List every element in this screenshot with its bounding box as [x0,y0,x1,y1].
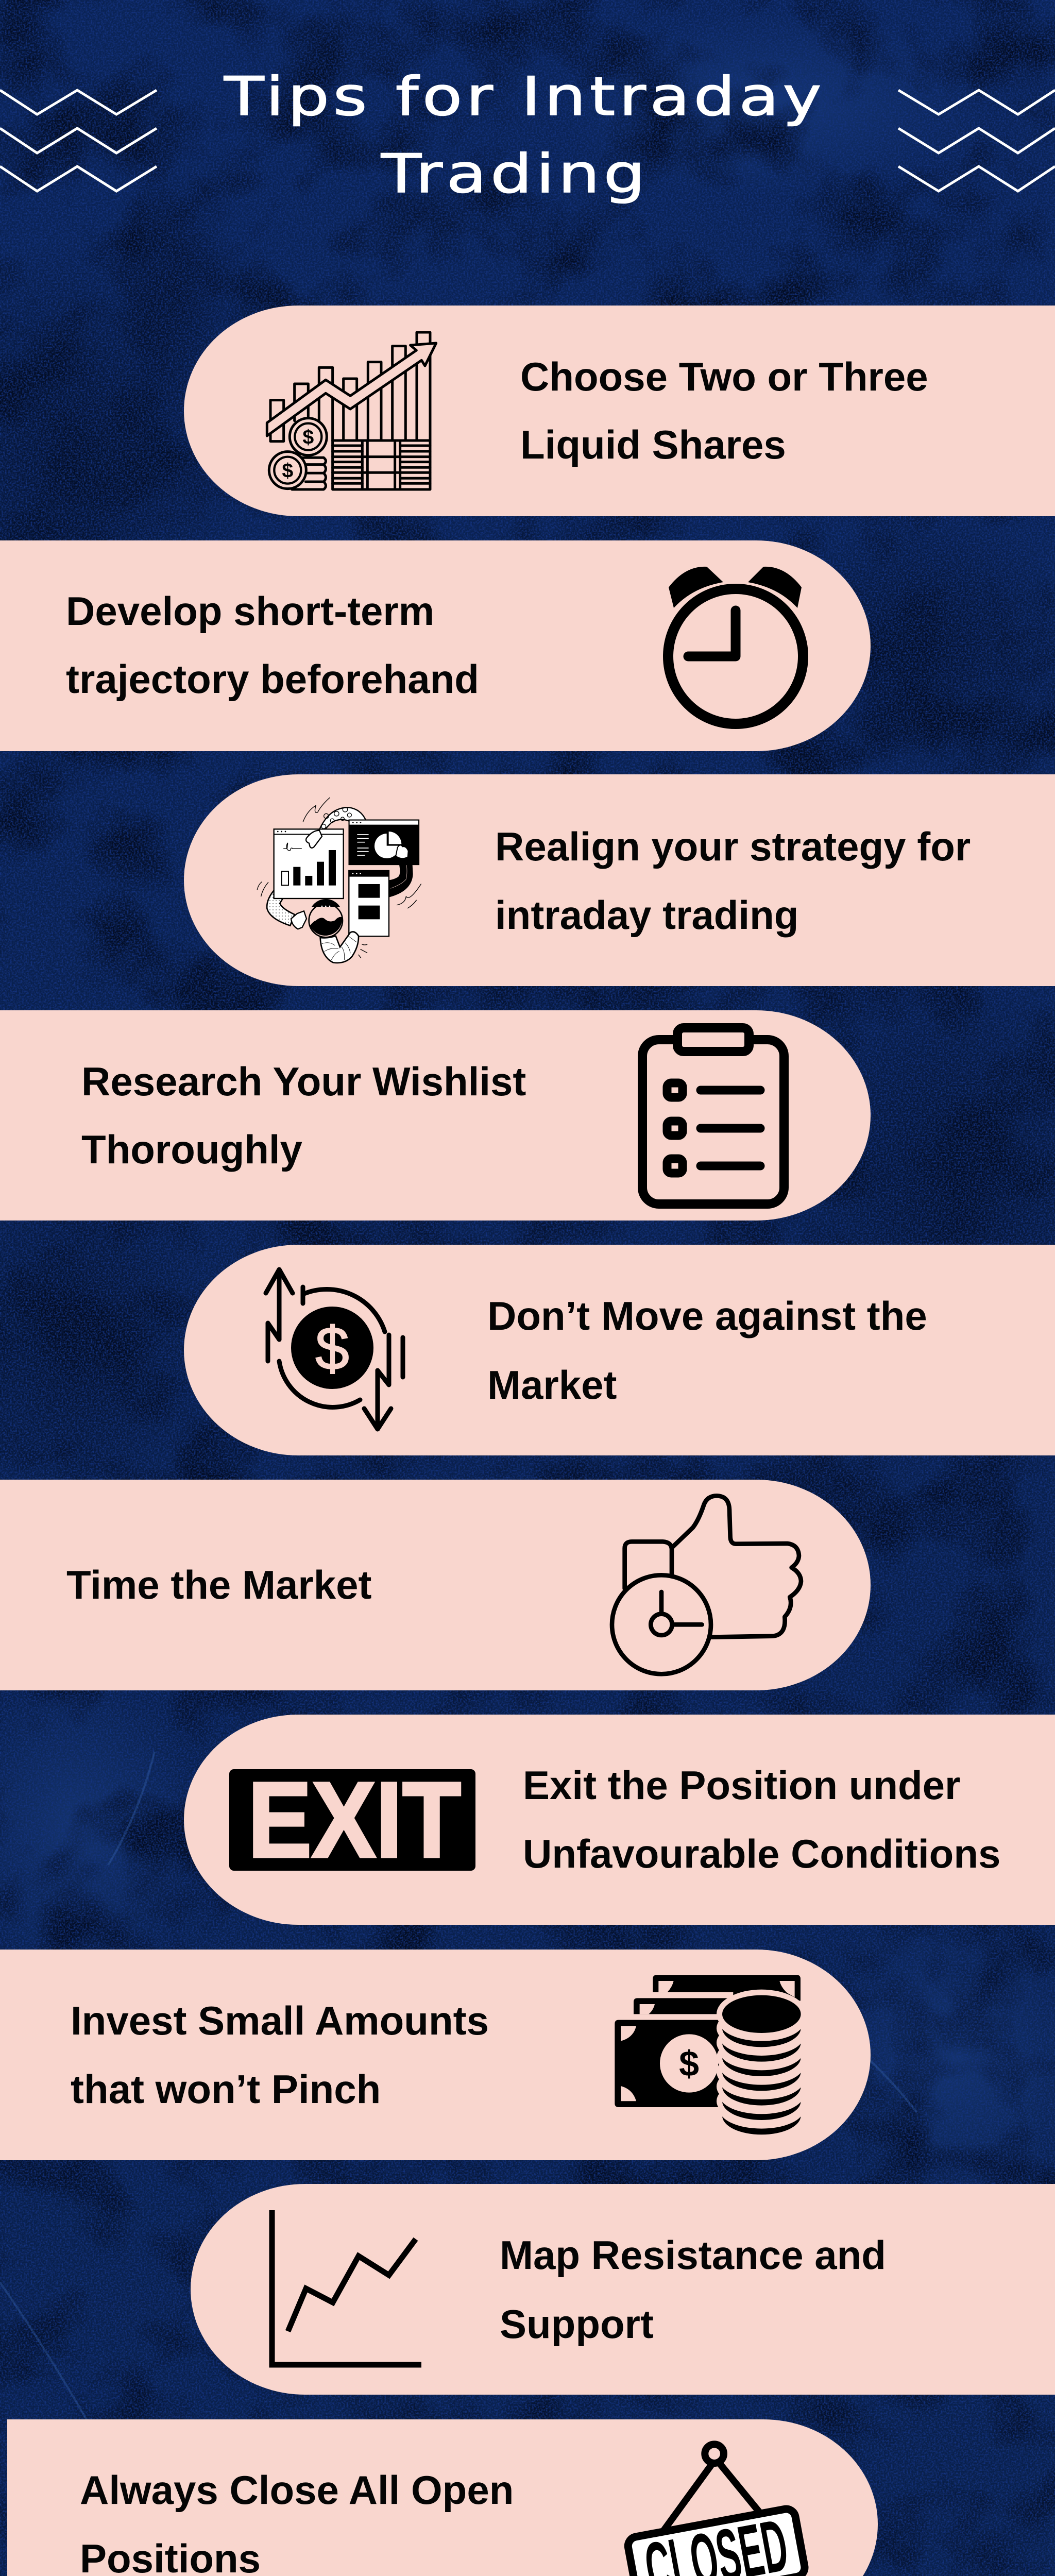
text: research your wishlist thoroughly: Thoroughly [81,1127,302,1172]
text: invest small amounts that won't pinch: that won’t Pinch [71,2066,381,2112]
icon: rising bar chart with coins: $ [282,460,293,482]
text: don't move against the market [487,1293,927,1408]
text: time the market: Time the Market [66,1562,371,1607]
text: don't move against the market: Don’t Move against the [487,1293,927,1338]
icon: thumbs up with clock [612,1496,801,1674]
title: Trading [381,143,649,205]
text: research your wishlist thoroughly [81,1059,526,1172]
text: realign your strategy for intraday trading: intraday trading [495,892,798,938]
panel: choose two or three liquid shares [184,306,1055,516]
icon: clipboard checklist [642,1028,784,1204]
icon: rising bar chart with coins [267,332,436,489]
icon: dollar with up and down arrows: $ [315,1315,349,1383]
text: don't move against the market: Market [487,1362,617,1408]
icon: banknotes and coin stack: $ [679,2043,699,2083]
icon: rising bar chart with coins: $ [302,426,314,449]
panel: exit the position [184,1715,1055,1925]
text: exit the position under unfavourable conditions [523,1762,1000,1876]
panel: realign your strategy [184,774,1055,986]
icon: banknotes and coin stack [615,1975,807,2138]
panel: develop short-term trajectory [0,540,871,751]
icon: alarm clock [668,567,803,724]
title [224,66,825,205]
icon: exit sign: EXIT [248,1760,461,1880]
decoration: left zigzag lines [0,90,157,191]
text: map resistance and support: Map Resistance and [500,2232,886,2278]
decoration: right zigzag lines [898,90,1055,191]
panel: time the market [0,1480,871,1690]
text: map resistance and support: Support [500,2301,654,2347]
icon: dollar with up and down arrows [266,1269,403,1429]
panel: always close all open positions [7,2419,878,2576]
icon: dashboards with hands illustration [257,798,421,963]
text: choose two or three liquid shares: Liquid Shares [520,422,786,467]
icon: closed hanging sign [625,2444,808,2576]
text: realign your strategy for intraday trading: Realign your strategy for [495,824,971,869]
text: develop short-term trajectory beforehand: trajectory beforehand [66,656,479,702]
panel: research your wishlist [0,1010,871,1221]
text: always close all open positions: Always Close All Open [80,2467,514,2513]
text: develop short-term trajectory beforehand: Develop short-term [66,588,434,634]
text: always close all open positions [80,2467,514,2576]
text: research your wishlist thoroughly: Research Your Wishlist [81,1059,526,1104]
text: develop short-term trajectory beforehand [66,588,479,702]
panel: invest small amounts [0,1950,871,2160]
text: realign your strategy for intraday trading [495,824,971,938]
icon: line chart [272,2210,421,2365]
text: invest small amounts that won't pinch [71,1998,489,2112]
text: choose two or three liquid shares: Choose Two or Three [520,354,928,399]
text: exit the position under unfavourable conditions: Exit the Position under [523,1762,960,1808]
text: exit the position under unfavourable conditions: Unfavourable Conditions [523,1831,1000,1876]
text: invest small amounts that won't pinch: Invest Small Amounts [71,1998,489,2043]
text: map resistance and support [500,2232,886,2347]
text: choose two or three liquid shares [520,354,928,467]
title: Tips for Intraday [224,66,825,128]
panel: map resistance and support [191,2184,1055,2395]
panel: don't move against the market [184,1245,1055,1455]
